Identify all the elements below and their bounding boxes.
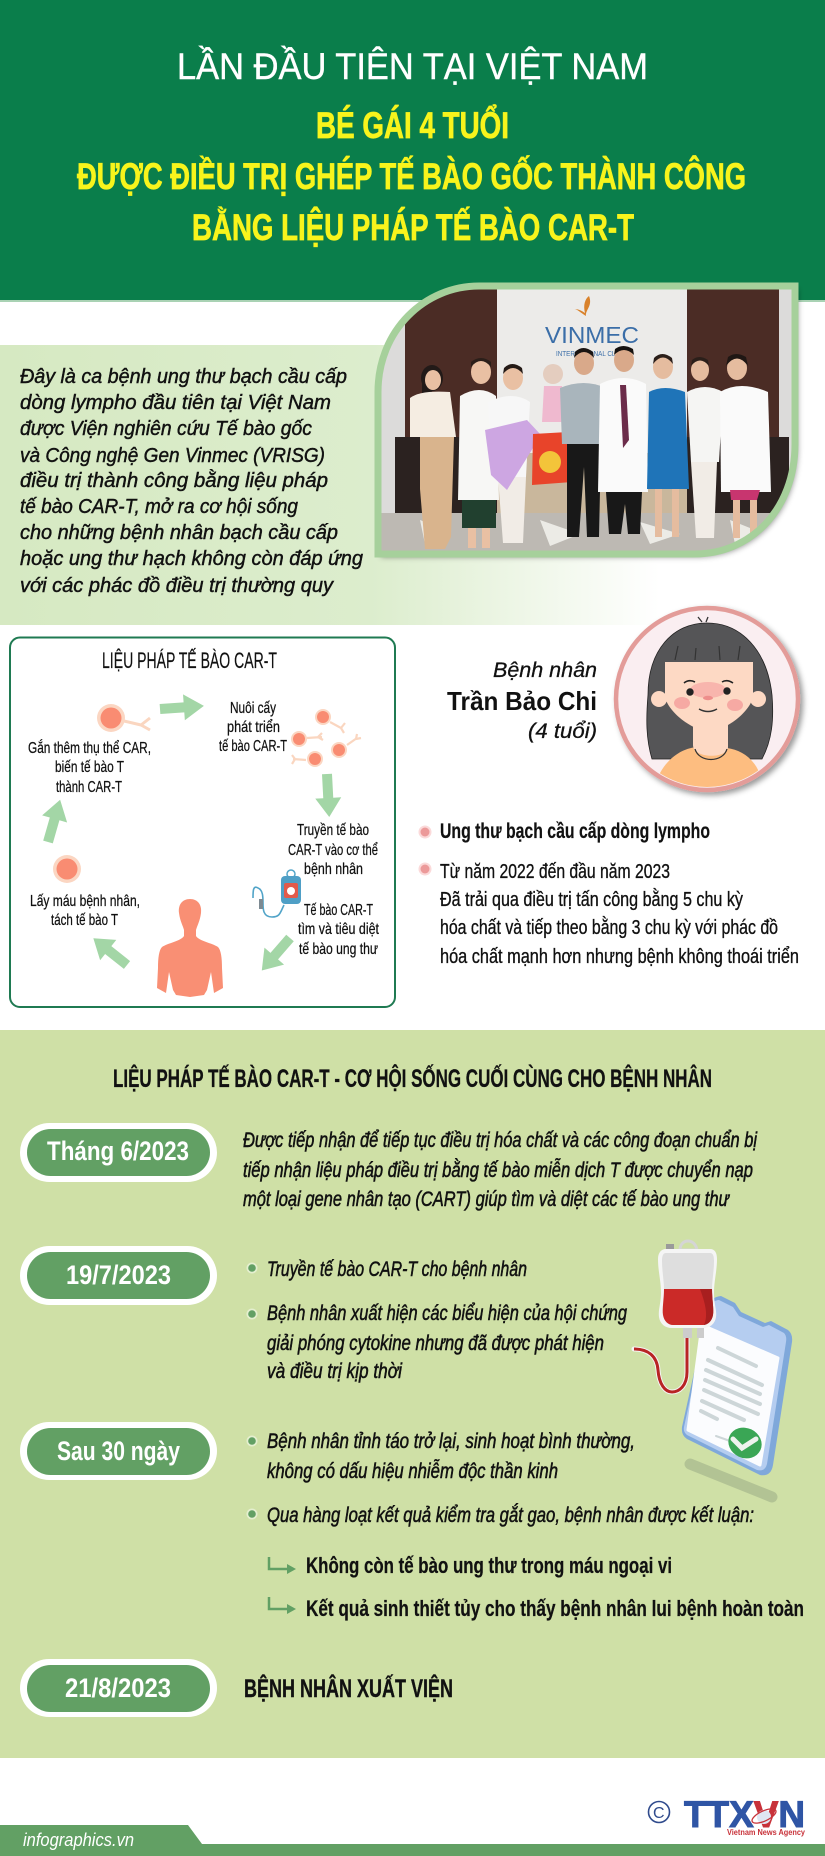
step label: infuse [288,822,378,878]
date pill: 21/8/2023: 21/8/2023 [65,1673,171,1703]
patient name block: Trần Bảo Chi [447,686,597,716]
title line 4: BẰNG LIỆU PHÁP TẾ BÀO CAR-T [192,206,634,248]
text: discharge: BỆNH NHÂN XUẤT VIỆN [244,1673,453,1703]
icon: CAR-T cell [97,704,150,732]
text: 19/7/2023: giải phóng cytokine nhưng đã được phát hiện [267,1332,604,1355]
step label: attach receptor: Gắn thêm thụ thể CAR, [28,738,151,757]
header banner [0,0,825,302]
text: 19/7/2023: Truyền tế bào CAR-T cho bệnh nhân [267,1258,527,1281]
icon: patient avatar [616,608,798,792]
step label: infuse: bệnh nhân [304,861,363,878]
step label: attach receptor [28,738,151,796]
date pill: after 30 days: Sau 30 ngày [57,1436,180,1466]
date pill: June 2023 [20,1123,217,1182]
step label: infuse: CAR-T vào cơ thể [288,841,378,859]
intro text: được Viện nghiên cứu Tế bào gốc [20,417,313,440]
text: after 30 days: không có dấu hiệu nhiễm độc thần kinh [267,1460,558,1483]
step label: attach receptor: biến tế bào T [55,759,124,776]
step label: destroy: tìm và tiêu diệt [298,921,379,938]
title line 2: BÉ GÁI 4 TUỔI [316,103,509,146]
arrow 3 [252,929,300,979]
step label: culture: tế bào CAR-T [219,738,287,755]
patient name block: (4 tuổi) [528,720,597,743]
intro text: với các phác đồ điều trị thường quy [20,574,335,597]
logo: TTXVN: Vietnam News Agency [727,1828,806,1837]
logo: TTXVN: C [653,1805,665,1822]
panel: timeline [0,1030,825,1758]
date pill: June 2023: Tháng 6/2023 [47,1136,189,1166]
patient name block [447,659,597,743]
intro text [20,365,364,597]
icon: patient body [157,899,223,997]
footer site name: infographics.vn [23,1830,134,1850]
icon: IV bag [253,870,301,917]
bullet: treatment history: Đã trải qua điều trị tấn công bằng 5 chu kỳ [440,888,743,911]
title line 1: LẦN ĐẦU TIÊN TẠI VIỆT NAM [177,46,648,87]
text: after 30 days: Bệnh nhân tỉnh táo trở lại, sinh hoạt bình thường, [267,1430,635,1453]
arrow 5 [36,796,73,846]
step label: culture: phát triển [227,718,280,736]
intro text: dòng lympho đầu tiên tại Việt Nam [20,391,331,414]
panel: CAR-T therapy diagram [10,638,395,1007]
step label: draw blood [30,893,140,929]
step label: draw blood: Lấy máu bệnh nhân, [30,893,140,910]
result 1: Không còn tế bào ung thư trong máu ngoại vi [306,1553,672,1578]
date pill: 19/7/2023 [20,1246,217,1305]
diagram title: LIỆU PHÁP TẾ BÀO CAR-T [102,648,277,673]
panel: intro background [0,345,825,625]
bullet: diagnosis: Ung thư bạch cầu cấp dòng lympho [440,820,710,843]
arrow 2 [314,773,342,818]
step label: culture [219,700,287,755]
bullet: treatment history [418,861,799,968]
intro text: hoặc ung thư hạch không còn đáp ứng [20,547,364,570]
step label: destroy: Tế bào CAR-T [304,902,373,919]
patient name block: Bệnh nhân [493,659,597,682]
bullet: treatment history: Từ năm 2022 đến đầu năm 2023 [440,861,670,883]
arrow 1 [159,693,205,722]
date pill: after 30 days [20,1422,217,1480]
icon: cultured cells [291,709,361,767]
step label: infuse: Truyền tế bào [297,822,369,839]
icon: T cell [53,855,81,883]
text: 19/7/2023: và điều trị kịp thời [267,1360,403,1383]
photo: team at Vinmec: VINMEC [545,322,639,348]
text: 19/7/2023 [246,1258,627,1383]
photo: team at Vinmec [378,286,798,556]
date pill: 21/8/2023 [20,1659,217,1717]
step label: destroy: tế bào ung thư [299,941,378,958]
intro text: tế bào CAR-T, mở ra cơ hội sống [20,495,299,518]
logo: TTXVN: TTXVN [684,1794,805,1835]
date pill: 19/7/2023: 19/7/2023 [66,1260,171,1290]
photo: team at Vinmec: INTERNATIONAL CLINIC [556,351,628,358]
intro text: điều trị thành công bằng liệu pháp [20,469,328,492]
illustration: blood bag and clipboard [634,1241,792,1497]
intro text: Đây là ca bệnh ung thư bạch cầu cấp [20,365,347,388]
footer strip [0,1825,825,1856]
text: June 2023 [243,1129,758,1211]
text: after 30 days [246,1430,754,1527]
step label: attach receptor: thành CAR-T [56,779,122,796]
patient details [418,820,799,968]
intro text: và Công nghệ Gen Vinmec (VRISG) [20,444,325,467]
step label: draw blood: tách tế bào T [51,912,118,929]
text: 19/7/2023: Bệnh nhân xuất hiện các biểu hiện của hội chứng [267,1302,627,1325]
step label: destroy [298,902,379,958]
arrow 4 [85,928,135,975]
step label: culture: Nuôi cấy [230,700,276,717]
intro text: cho những bệnh nhân bạch cầu cấp [20,521,338,544]
